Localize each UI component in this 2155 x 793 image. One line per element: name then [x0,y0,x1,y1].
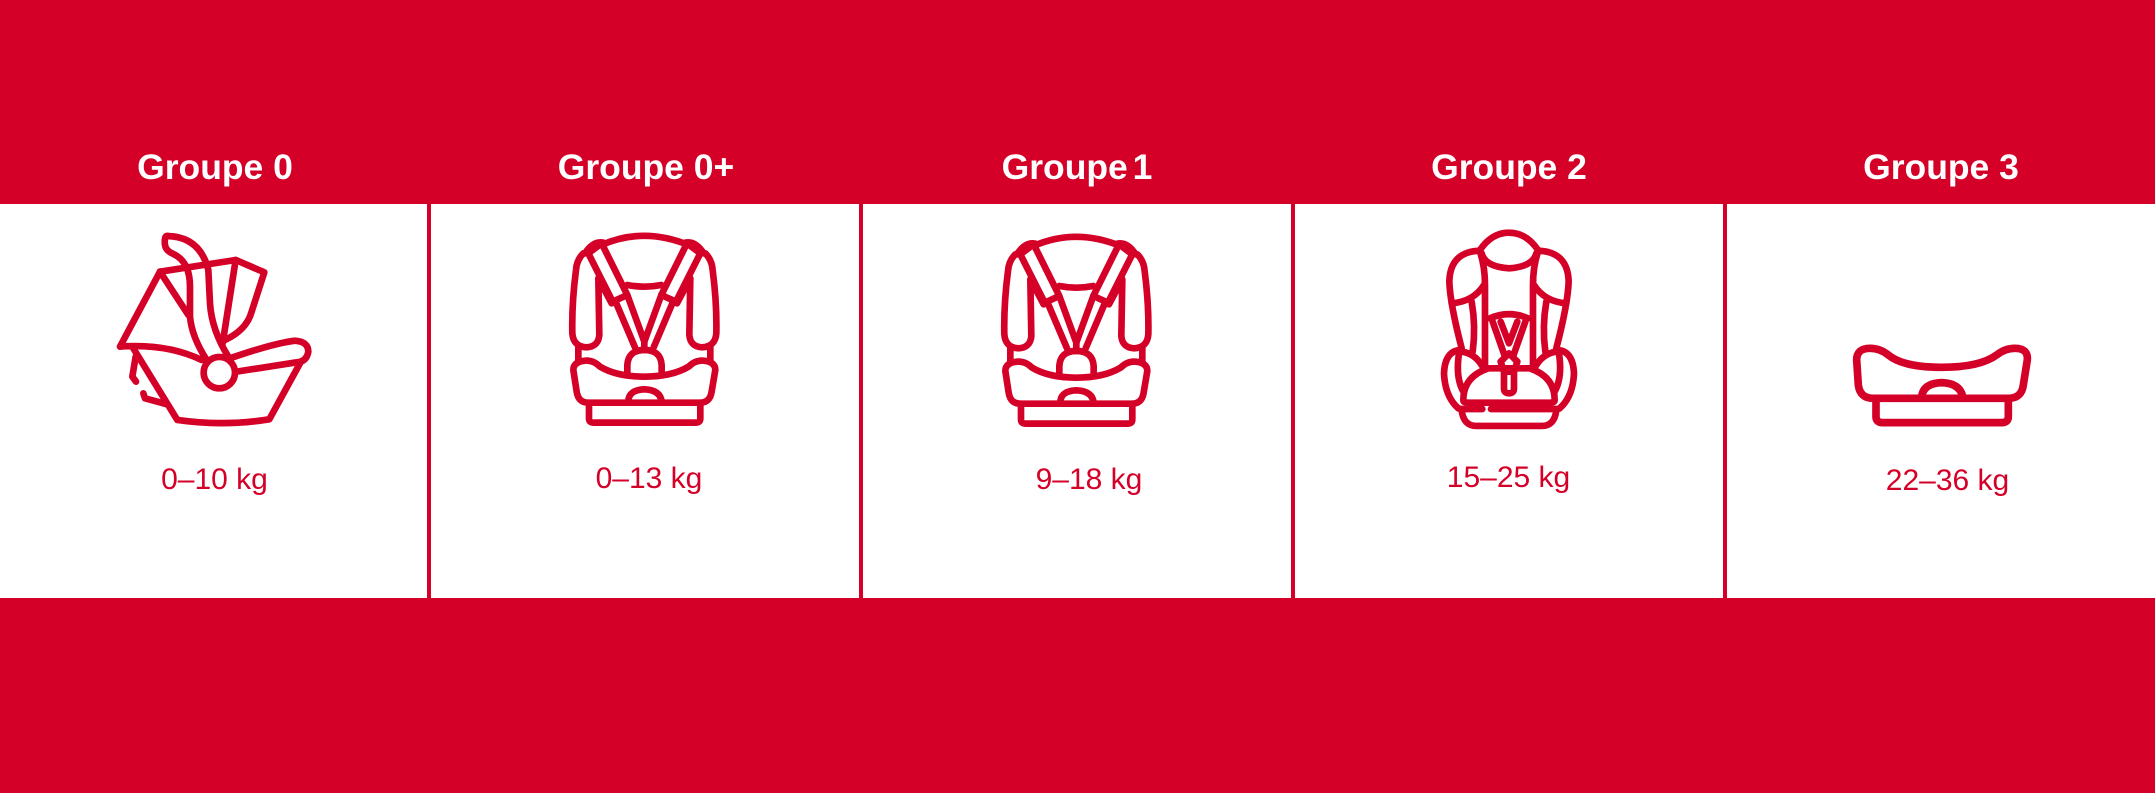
panel: white table band [0,204,2155,598]
icon: booster cushion group 3 [1857,348,2027,423]
icon: harness seat group 0+ [572,236,716,423]
heading: Groupe 0+: Groupe 0+ [558,147,734,187]
label: weight 22–36 kg: 22–36 kg [1886,464,2009,497]
heading: Groupe 3: Groupe 3 [1863,147,2019,187]
label: weight 15–25 kg: 15–25 kg [1447,461,1570,494]
icon: harness seat group 1 [1004,237,1148,424]
heading: Groupe 0: Groupe 0 [137,147,293,187]
icon: high-back booster group 2 [1444,233,1574,426]
label: weight 0–10 kg: 0–10 kg [161,463,268,496]
heading: Groupe 1: Groupe 1 [1002,147,1152,187]
heading: Groupe 2: Groupe 2 [1431,147,1587,187]
icon: infant carrier [120,236,308,423]
label: weight 9–18 kg: 9–18 kg [1036,463,1142,496]
label: weight 0–13 kg: 0–13 kg [596,462,702,495]
